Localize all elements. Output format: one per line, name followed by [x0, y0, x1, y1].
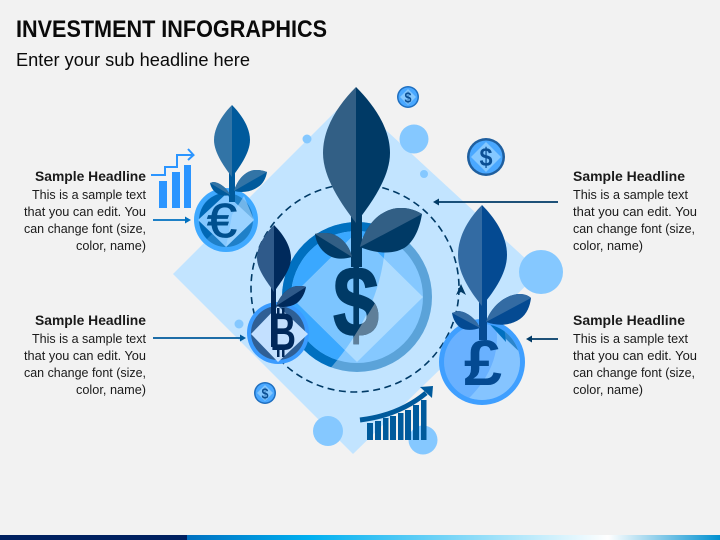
text block: top left [24, 169, 147, 253]
text block: bottom right: Sample Headline [573, 313, 686, 328]
icon: orbit arrowhead [456, 284, 466, 295]
arrow: euro [153, 216, 191, 224]
pound coin [439, 205, 531, 410]
dollar sign: $ [333, 246, 379, 358]
coin face [291, 231, 423, 363]
text block: top right: that you can edit. You [573, 205, 697, 219]
text block: top right: This is a sample text [573, 188, 689, 202]
text block: top left: can change font (size, [24, 222, 146, 236]
text block: bottom right: This is a sample text [573, 332, 689, 346]
text block: bottom right: that you can edit. You [573, 349, 697, 363]
euro sign: € [207, 195, 237, 248]
dollar sign: $ [333, 246, 379, 358]
text block: top right [573, 169, 697, 253]
bitcoin sign: B [270, 303, 296, 362]
icon: small coin top [397, 86, 419, 108]
decorative circles [234, 124, 563, 454]
top leaf [257, 225, 291, 292]
text block: bottom right: can change font (size, [573, 366, 695, 380]
right leaf [360, 208, 422, 252]
left leaf [210, 182, 230, 196]
text block: top right: can change font (size, [573, 222, 695, 236]
icon: small coin bottom [254, 382, 276, 404]
background diamond [173, 97, 540, 454]
icon: medium coin [467, 138, 505, 176]
euro coin [194, 105, 267, 252]
footer bar [0, 535, 720, 540]
main dollar coin [282, 87, 432, 372]
pound sign: £ [464, 327, 502, 399]
icon: small coin bottom: $ [262, 386, 269, 402]
title: INVESTMENT INFOGRAPHICS [16, 16, 327, 43]
text block: bottom left: that you can edit. You [24, 349, 146, 363]
text block: bottom right: color, name) [573, 383, 643, 397]
top leaf [458, 205, 507, 306]
right leaf [486, 294, 531, 325]
coin body [194, 188, 258, 252]
text block: top right: Sample Headline [573, 169, 686, 184]
icon: small coin top: $ [404, 90, 412, 106]
bar chart icon: bottom [360, 386, 433, 440]
stem [229, 172, 235, 202]
left leaf [315, 233, 352, 259]
stem [479, 298, 487, 340]
right leaf [276, 286, 306, 307]
subtitle: Enter your sub headline here [16, 50, 250, 70]
text block: top left: Sample Headline [35, 169, 146, 184]
text block: top left: color, name) [76, 239, 146, 253]
text block: bottom left: can change font (size, [24, 366, 146, 380]
text block: top right: color, name) [573, 239, 643, 253]
text block: bottom right [573, 313, 697, 397]
big leaf [323, 87, 390, 223]
text block: bottom left: Sample Headline [35, 313, 146, 328]
top leaf [214, 105, 250, 177]
coin ring [282, 222, 432, 372]
stem [351, 215, 362, 267]
text block: bottom left [24, 313, 147, 397]
right leaf [234, 170, 267, 192]
text block: top left: This is a sample text [32, 188, 147, 202]
coin body [439, 319, 525, 405]
text block: bottom left: color, name) [76, 383, 146, 397]
bar chart icon: left [151, 149, 194, 208]
arrow: pound [526, 336, 558, 342]
arrow: dollar [433, 198, 558, 206]
left leaf [452, 311, 480, 330]
text block: bottom left: This is a sample text [32, 332, 147, 346]
dashed orbit circle [251, 184, 459, 392]
stem [271, 285, 276, 347]
arrow: bitcoin [153, 334, 246, 342]
coin body [247, 302, 309, 364]
text block: top left: that you can edit. You [24, 205, 146, 219]
dollar sign [333, 267, 378, 344]
bitcoin coin [247, 225, 309, 364]
icon: medium coin: $ [480, 142, 493, 172]
